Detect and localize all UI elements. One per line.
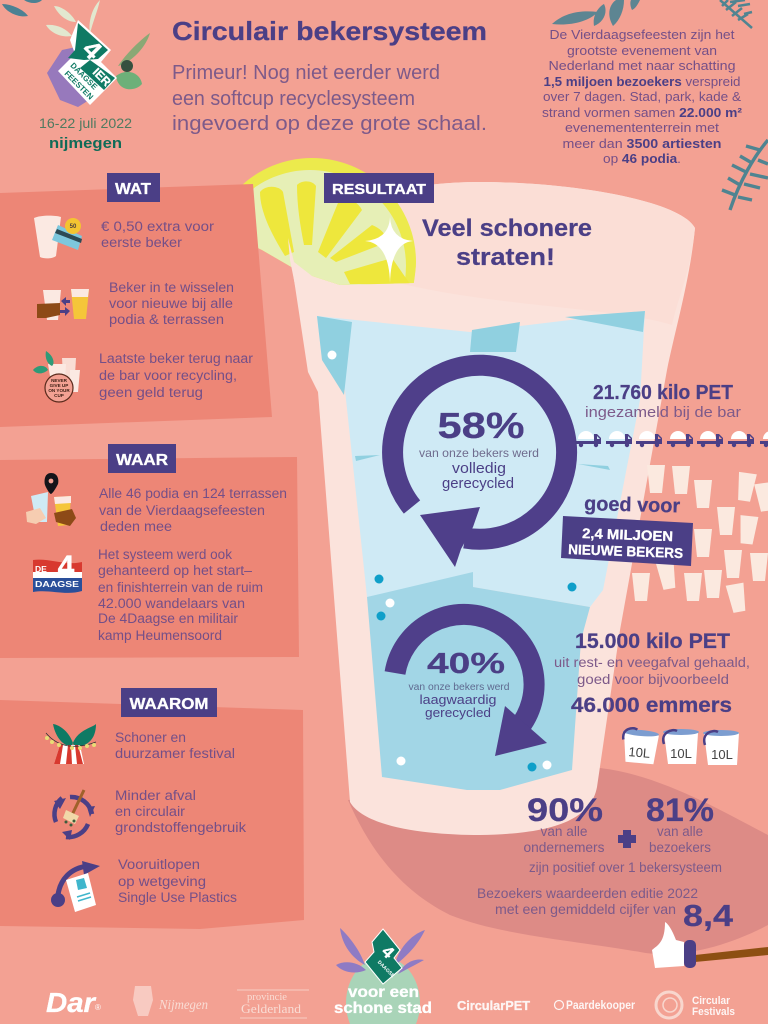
stat: 21.760 kilo PET: 21.760 kilo PET [593,382,733,404]
text: beker wisselen [109,280,234,327]
text: het systeem: De 4Daagse en militair [98,611,239,626]
heading: wat [107,173,160,202]
stat: 81 percent bezoekers [646,792,714,855]
sponsor logo: circular festivals: Festivals [692,1006,735,1018]
icons: buckets: 10L [670,746,692,761]
text: het systeem [98,547,263,643]
text: festival date: nijmegen [49,135,122,152]
stat: 58 percent: van onze bekers werd [419,446,539,460]
text: extra voor eerste beker [101,219,215,250]
text: laatste beker [99,351,254,400]
stat: 40 percent [408,648,510,720]
icon: cups with badge and leaves: ON YOUR [48,388,70,393]
stat: 15.000 kilo PET [554,630,750,717]
icons: buckets: 10L [711,747,733,762]
footer logo: vierdaagsefeesten voor een schone stad: 4 [378,942,398,963]
text: extra voor eerste beker: € 0,50 extra voor [101,219,215,234]
text: about the event: meer dan 3500 artiesten [562,136,722,151]
stat: 81 percent bezoekers: van alle [657,823,703,839]
sponsor logo: paardekooper: Paardekooper [566,998,635,1012]
text: vooruitlopen: op wetgeving [118,874,206,889]
heading: veel schonere straten: Veel schonere [422,215,592,242]
logo: vierdaagsefeesten: IER [90,65,114,89]
stat: 40 percent: van onze bekers werd [408,681,510,693]
text: beker wisselen: Beker in te wisselen [109,280,234,295]
text: minder afval: Minder afval [115,788,196,803]
text: gemiddeld cijfer: met een gemiddeld cijfer van [495,901,676,917]
icon: cups with badge and leaves [33,351,80,402]
stat: 15.000 kilo PET: 46.000 emmers [571,694,732,717]
icon: cup with payment card [34,216,82,258]
arrow ring: 58 percent [393,365,567,567]
sponsor logo: circularpet: CircularPET [457,998,530,1013]
text: schoner: Schoner en [115,730,186,745]
intro text [172,61,487,135]
text: minder afval [115,788,246,835]
sponsor logo: circular festivals [656,992,735,1018]
sponsor logo: provincie gelderland: provincie [247,991,287,1003]
sponsor logo: dar: Dar [46,987,97,1018]
stat: 58 percent [419,405,539,492]
text: het systeem: gehanteerd op het start– [98,563,253,578]
icon: cups with badge and leaves: GIVE UP [50,383,68,388]
liquid upper: fully recycled [317,311,645,607]
text: goed voor: goed voor [584,493,681,518]
text: about the event: op 46 podia. [603,151,681,166]
text: about the event: 1,5 miljoen bezoekers verspreid [544,74,740,89]
icon: de 4daagse logo: DE [35,564,47,574]
stat: 15.000 kilo PET: uit rest- en veegafval gehaald, [554,655,750,670]
stat: 40 percent: gerecycled [425,705,491,720]
intro text: een softcup recyclesysteem [172,87,415,110]
stat: 15.000 kilo PET: 15.000 kilo PET [575,630,730,653]
title: Circulair bekersysteem [172,16,487,46]
text: laatste beker: de bar voor recycling, [99,368,237,383]
text: about the event [542,27,743,166]
panel: waarom [0,688,304,929]
text: about the event: Nederland met naar schatting [548,58,736,73]
text: minder afval: grondstoffengebruik [115,820,246,835]
banner: nieuwe bekers: NIEUWE BEKERS [568,541,683,561]
banner: nieuwe bekers [561,516,693,566]
sponsor logo: nijmegen: Nijmegen [158,998,208,1013]
logo: vierdaagsefeesten: DAAGSE [68,61,100,92]
liquid lower: low value recycled [367,572,590,790]
icon: plus [618,830,636,848]
icon: festival tent with leaves [45,724,96,764]
icons: trucks [575,431,768,447]
text: het systeem: 42.000 wandelaars van [98,596,245,611]
icon: recycle arrows with broom [54,790,95,840]
lemon slice [242,158,416,285]
panel: wat [0,173,272,427]
stat: 81 percent bezoekers: 81% [646,792,714,828]
decorative leaves top right [552,0,768,210]
text: het systeem: en finishterrein van de ruim [98,580,263,595]
stat: 90 percent ondernemers [524,792,604,855]
icon: de 4daagse logo: DAAGSE [35,579,79,589]
text: het systeem: Het systeem werd ook [98,547,232,562]
arrow ring: 40 percent [395,614,547,756]
text: alle podia [99,486,287,534]
text: beker wisselen: voor nieuwe bij alle [109,296,233,311]
text: vooruitlopen: Vooruitlopen [118,857,200,872]
heading: wat: WAT [115,181,151,198]
text: gemiddeld cijfer: Bezoekers waardeerden editie 2022 [477,885,698,901]
cup [288,182,695,835]
sponsor logo: nijmegen [133,986,208,1016]
icon: cups with badge and leaves: CUP [54,393,64,398]
logo: vierdaagsefeesten [2,0,150,107]
text: about the event: De Vierdaagsefeesten zijn het [550,27,735,42]
text: about the event: evenemententerrein met [565,120,719,135]
sponsor logo: provincie gelderland [237,990,309,1018]
text: gemiddeld cijfer: 8,4 [683,898,734,933]
sparkle [365,217,413,283]
icons: buckets: 10L [628,744,651,761]
sponsor logo: circular festivals: Circular [692,995,731,1007]
text: laatste beker: geen geld terug [99,385,203,400]
sponsor logo: dar: ® [95,1003,101,1012]
panel: waar [0,444,299,658]
text: alle podia: van de Vierdaagsefeesten [99,503,265,518]
heading: veel schonere straten [422,215,592,271]
icon: thumbs up [652,922,768,968]
text: festival date: 16-22 juli 2022 [39,116,132,131]
banner: nieuwe bekers: 2,4 MILJOEN [582,525,673,544]
logo: vierdaagsefeesten: FEESTEN [63,69,95,102]
heading: waar: WAAR [116,452,168,469]
text: vooruitlopen [118,857,237,905]
text: schoner [115,730,235,761]
stat: 90 percent ondernemers: van alle [540,823,588,839]
icon: de 4daagse logo [33,550,82,593]
icon: forward arrow with document [51,861,100,912]
text: laatste beker: Laatste beker terug naar [99,351,254,366]
intro text: Primeur! Nog niet eerder werd [172,61,440,84]
icon: de 4daagse logo: 4 [58,550,75,583]
stat: 81 percent bezoekers: bezoekers [649,839,711,855]
text: het systeem: kamp Heumensoord [98,628,222,643]
heading: waar [108,444,176,473]
icon: cup with payment card: 50 [70,224,77,230]
text: alle podia: Alle 46 podia en 124 terrassen [99,486,287,501]
logo: vierdaagsefeesten: 4 [77,34,108,66]
stat: 40 percent: 40% [427,648,505,680]
text: vooruitlopen: Single Use Plastics [118,890,237,905]
cup edge over lemon [288,238,330,300]
stat: 21.760 kilo PET [585,382,741,421]
text: about the event: strand vormen samen 22.000 m² [542,105,743,120]
stat: 40 percent: laagwaardig [420,692,496,707]
footer logo: vierdaagsefeesten voor een schone stad: schone stad [334,1000,432,1017]
text: beker wisselen: podia & terrassen [109,312,224,327]
text: about the event: over 7 dagen. Stad, park, kade & [543,89,741,104]
background shape: darker area behind survey results [348,768,768,954]
footer logo: vierdaagsefeesten voor een schone stad: voor een [348,984,419,1001]
heading: resultaat: RESULTAAT [332,181,426,198]
intro text: ingevoerd op deze grote schaal. [172,112,487,135]
text: festival date [39,116,132,152]
footer logo: vierdaagsefeesten voor een schone stad [334,928,432,1024]
bubbles [328,350,576,772]
text: schoner: duurzamer festival [115,746,235,761]
heading: waarom: WAAROM [130,696,208,713]
icon: cup exchange [37,289,89,320]
icons: buckets [620,727,739,765]
footer logo: vierdaagsefeesten voor een schone stad: DAAGSE [376,960,396,979]
heading: resultaat [324,173,434,203]
heading: waarom [121,688,217,717]
stat: 58 percent: volledig [452,460,506,477]
text: minder afval: en circulair [115,804,186,819]
stat: 58 percent: 58% [438,405,524,446]
text: about the event: grootste evenement van [567,43,717,58]
icon: map pin with toasting cups [26,473,76,526]
stat: 15.000 kilo PET: goed voor bijvoorbeeld [577,672,729,687]
icon: cups with badge and leaves: NEVER [51,378,68,383]
heading: veel schonere straten: straten! [456,244,555,271]
text: alle podia: deden mee [100,519,172,534]
icons: new cups [632,465,768,613]
stat: 90 percent ondernemers: ondernemers [524,839,604,855]
stat: 90 percent ondernemers: 90% [527,792,603,828]
text: extra voor eerste beker: eerste beker [101,235,183,250]
text: positief: zijn positief over 1 bekersysteem [529,859,722,875]
sponsor logo: provincie gelderland: Gelderland [241,1001,302,1016]
text: gemiddeld cijfer [477,885,734,933]
stat: 58 percent: gerecycled [442,475,514,492]
stat: 21.760 kilo PET: ingezameld bij de bar [585,404,741,421]
